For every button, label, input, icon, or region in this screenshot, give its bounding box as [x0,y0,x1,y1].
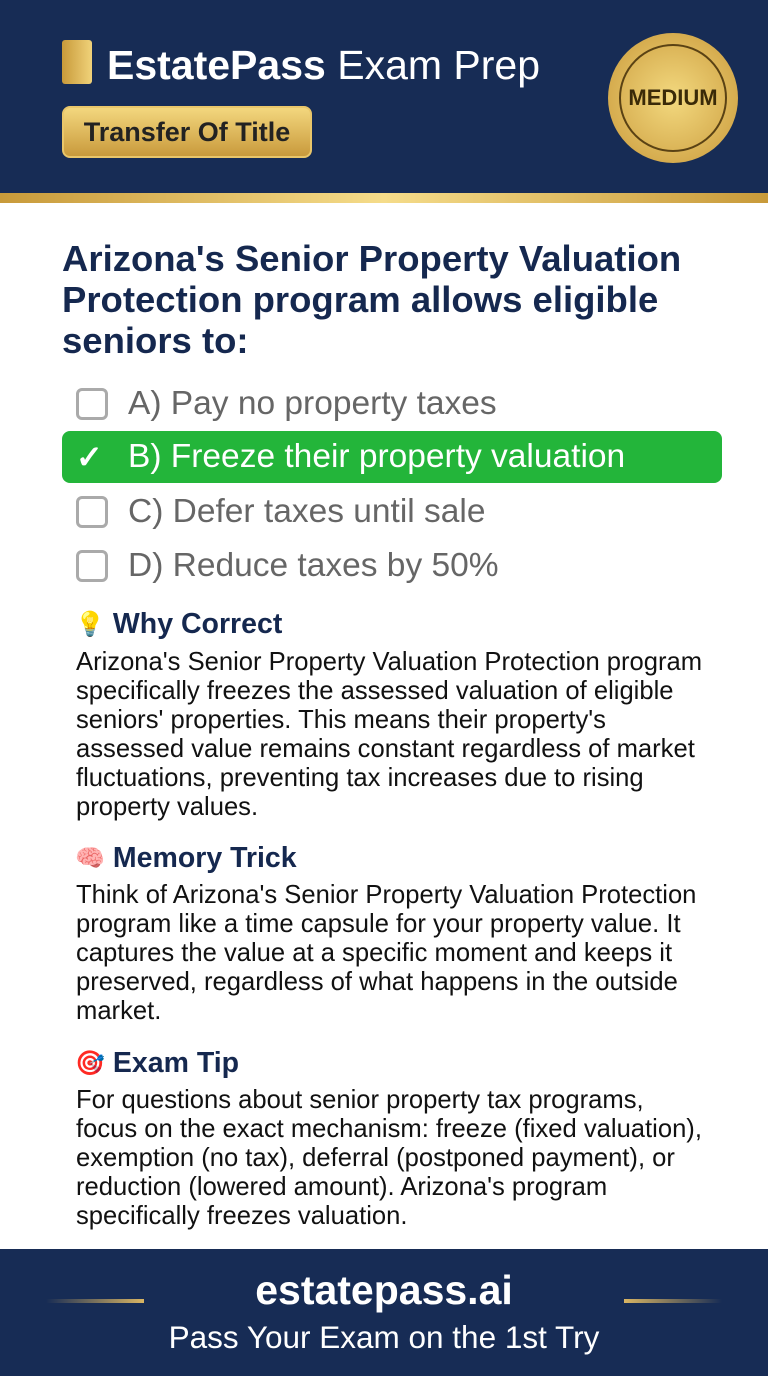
footer [0,1249,768,1376]
text: why correct: Arizona's Senior Property Valuation Protection program specifically freezes the assessed valuation of eligible seniors' properties. This means their property's assessed value remains constant regardless of market fluctuations, preventing tax increases due to rising property values. [76,648,702,821]
text: exam tip: focus on the exact mechanism: freeze (fixed valuation), [76,1115,702,1143]
option C: C) Defer taxes until sale [128,493,485,530]
option B correct [62,431,722,483]
option B correct: B) Freeze their property valuation [128,438,625,475]
text: exam tip: specifically freezes valuation. [76,1202,407,1230]
text: exam tip: For questions about senior property tax programs, [76,1086,644,1114]
question: Arizona's Senior Property Valuation Protection program allows eligible seniors to: [62,238,681,361]
brand title: EstatePass Exam Prep [107,42,540,88]
heading: memory trick: 🧠 [75,845,105,872]
heading: why correct: Why Correct [113,608,282,640]
category badge [62,106,312,158]
footer tagline: Pass Your Exam on the 1st Try [169,1319,599,1355]
ornament right [624,1299,722,1303]
heading: why correct: 💡 [75,611,105,638]
difficulty seal: MEDIUM [628,85,718,110]
footer url: estatepass.ai [255,1267,513,1313]
option A: A) Pay no property taxes [128,385,497,422]
header [0,0,768,193]
heading: exam tip: 🎯 [75,1050,105,1077]
category badge: Transfer Of Title [84,116,290,146]
ornament left [46,1299,144,1303]
heading: memory trick: Memory Trick [113,842,297,874]
text: exam tip: exemption (no tax), deferral (postponed payment), or [76,1144,675,1172]
option D: D) Reduce taxes by 50% [128,547,499,584]
icon: document [62,40,92,84]
text: memory trick: Think of Arizona's Senior Property Valuation Protection program like a time capsule for your property value. It captures the value at a specific moment and keeps it preserved, regardless of what happens in the outside market. [76,881,696,1025]
text: exam tip: reduction (lowered amount). Arizona's program [76,1173,607,1201]
difficulty seal [608,33,738,163]
text: exam tip [76,1086,702,1230]
option B correct: ✓ [76,439,103,475]
heading: exam tip: Exam Tip [113,1047,239,1079]
